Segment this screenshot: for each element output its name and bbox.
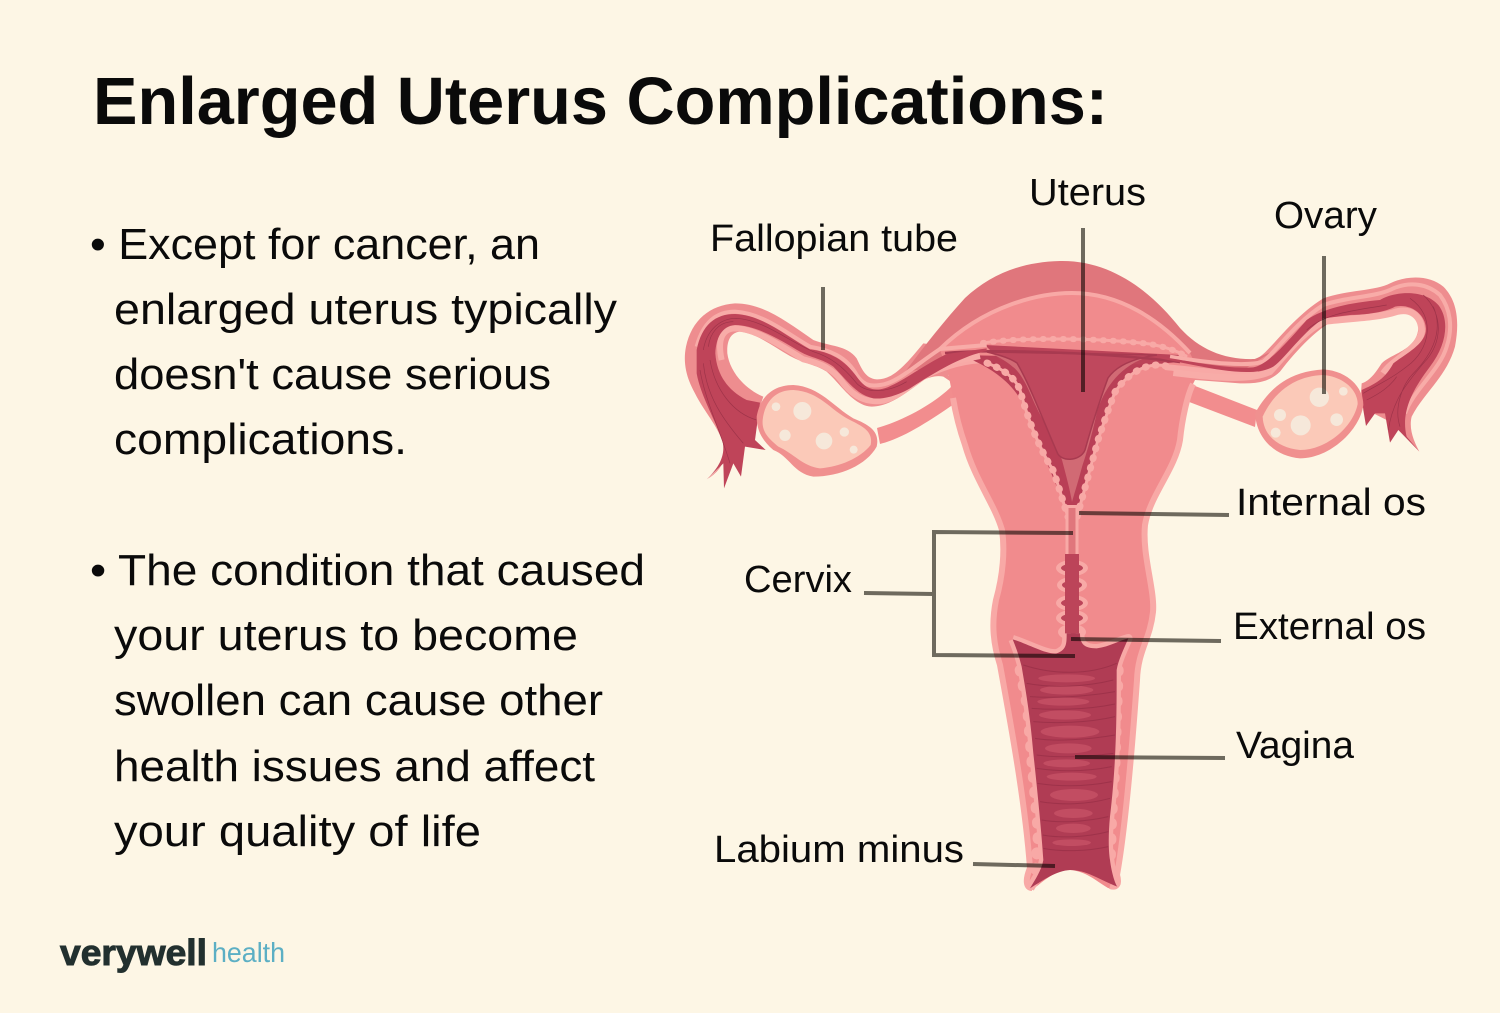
text block: second bullet: health issues and affect [114, 742, 595, 791]
uterine fundus [905, 261, 1275, 372]
right ovary [1255, 369, 1363, 458]
logo: verywell health: health [212, 937, 285, 968]
text block: second bullet: your uterus to become [114, 611, 578, 660]
label: ovary: Ovary [1274, 195, 1377, 237]
label: fallopian tube: Fallopian tube [710, 218, 958, 260]
text block: first bullet [90, 220, 617, 464]
text block: first bullet: • Except for cancer, an [90, 220, 540, 269]
uterine cavity [945, 345, 1195, 520]
left tube lumen [697, 312, 987, 488]
text block: first bullet: enlarged uterus typically [114, 285, 617, 334]
body light outline [925, 293, 1258, 888]
label: vagina: Vagina [1236, 725, 1355, 767]
label: cervix: Cervix [744, 559, 852, 601]
left ovary [757, 385, 877, 477]
label: labium minus: Labium minus [714, 829, 964, 871]
text block: second bullet: your quality of life [114, 807, 481, 856]
vagina [1013, 633, 1128, 888]
label: external os: External os [1233, 606, 1426, 648]
label: uterus: Uterus [1029, 172, 1146, 214]
diagram labels [710, 172, 1426, 871]
anatomical diagram: uterus [685, 172, 1457, 890]
text block: second bullet [90, 546, 645, 856]
text block: second bullet: • The condition that caused [90, 546, 645, 595]
right fallopian tube wall [1173, 277, 1457, 452]
text block: second bullet: swollen can cause other [114, 676, 603, 725]
text block: first bullet: complications. [114, 415, 407, 464]
right tube lumen [1160, 284, 1450, 452]
logo: verywell health: verywell [60, 932, 207, 973]
cervical canal [1056, 505, 1088, 645]
text block: first bullet: doesn't cause serious [114, 350, 551, 399]
left fallopian tube wall [685, 303, 990, 479]
ligaments [877, 384, 1257, 444]
logo: verywell health [60, 932, 285, 973]
uterus and vaginal body [940, 293, 1199, 890]
endometrium wavy lining [983, 339, 1186, 517]
label: internal os: Internal os [1236, 482, 1426, 524]
leader lines [823, 228, 1324, 866]
title: Enlarged Uterus Complications: [93, 64, 1108, 139]
